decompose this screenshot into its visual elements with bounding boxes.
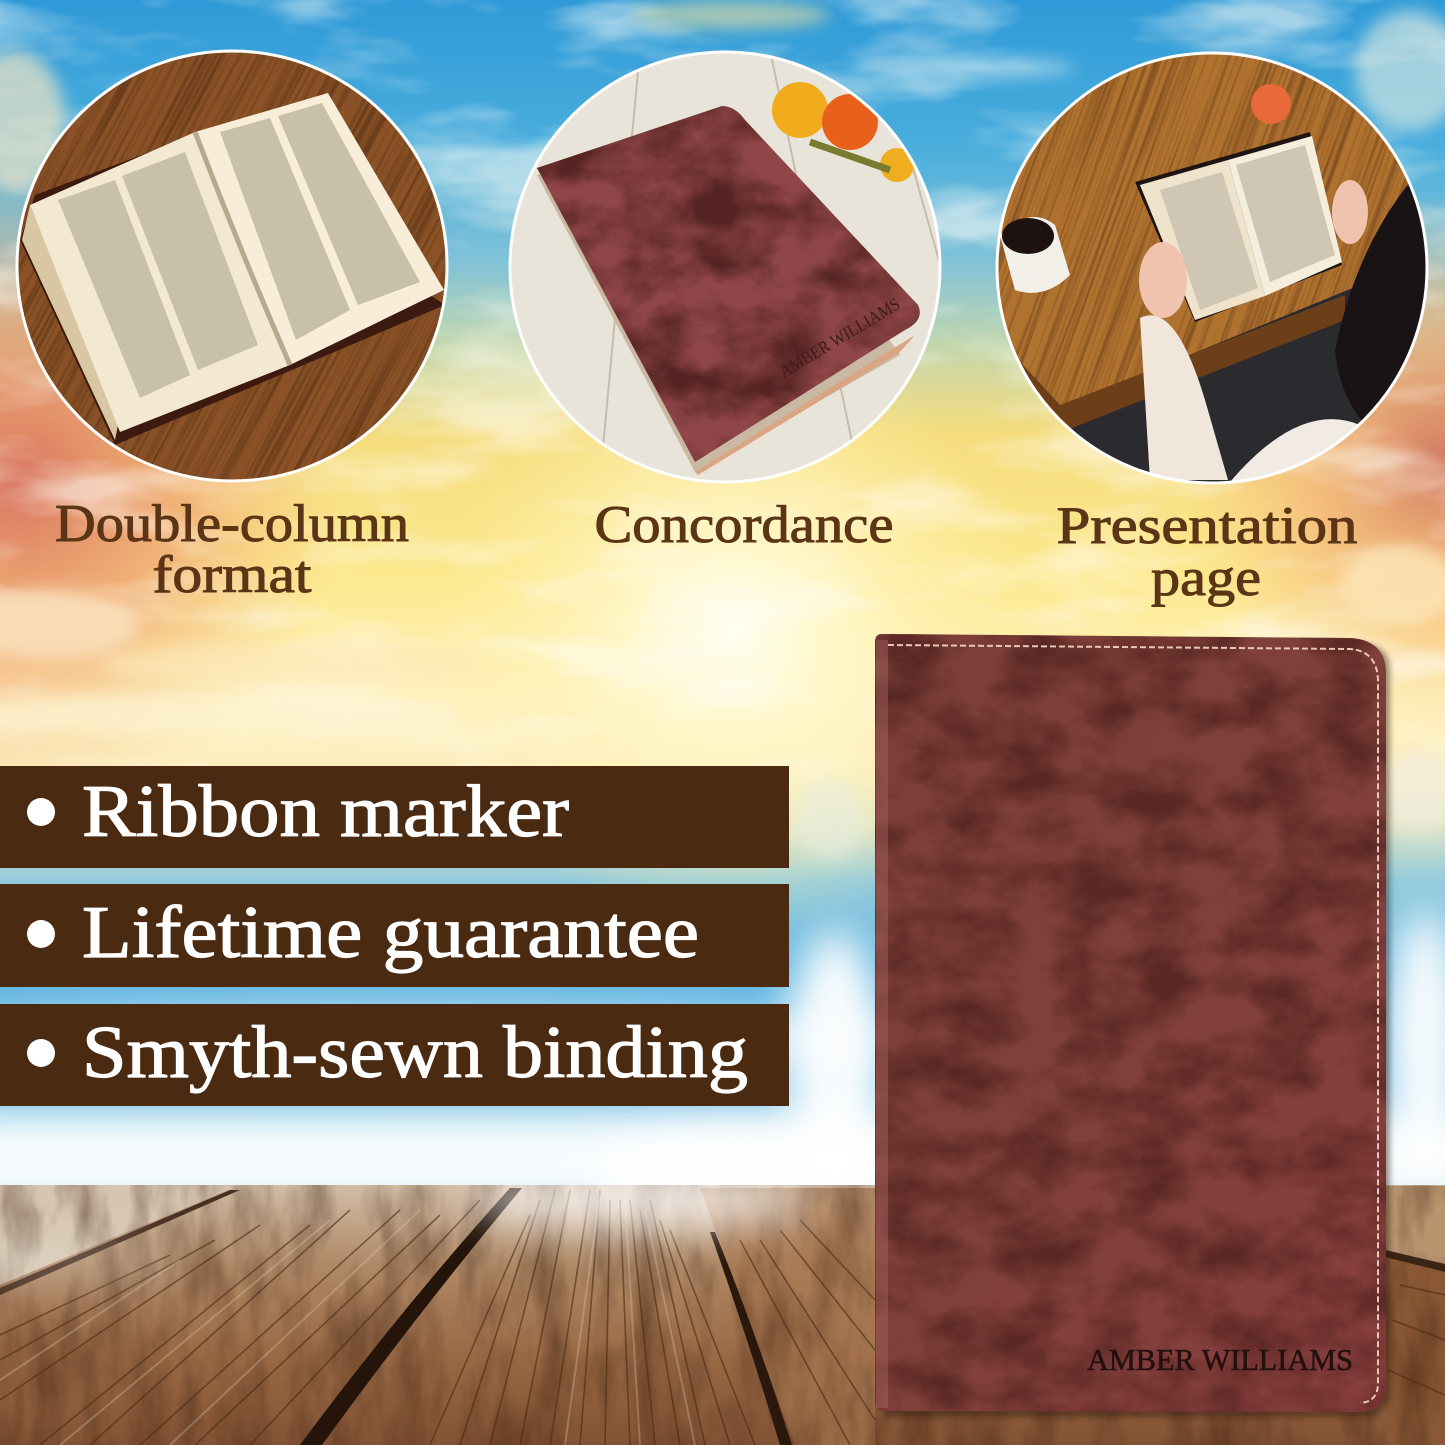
- caption: concordance: Concordance: [594, 496, 894, 554]
- plank grain lines: [0, 1190, 1445, 1445]
- feature bar: ribbon marker: [0, 766, 789, 868]
- wooden deck: [0, 1172, 1445, 1445]
- stitching: [888, 645, 1378, 1403]
- engraved name small: AMBER WILLIAMS: [776, 294, 903, 381]
- caption: presentation page: Presentation: [1056, 497, 1358, 555]
- caption: double-column format: [55, 495, 409, 604]
- photo circle: open bible on wood table: [16, 50, 448, 482]
- photo circle: woman reading at table: [996, 52, 1428, 484]
- flowers decoration: [772, 82, 914, 182]
- feature bar: smyth-sewn binding: [0, 1004, 789, 1106]
- photo circle: closed bible with flowers: [500, 40, 960, 490]
- page text columns: [58, 103, 420, 398]
- feature bar: lifetime guarantee: Lifetime guarantee: [82, 892, 699, 974]
- engraved name: AMBER WILLIAMS: [1087, 1342, 1353, 1377]
- feature bar: ribbon marker: Ribbon marker: [82, 771, 569, 853]
- feature bar: smyth-sewn binding: Smyth-sewn binding: [82, 1012, 748, 1094]
- caption: double-column format: Double-column: [55, 495, 409, 553]
- caption: presentation page: page: [1151, 549, 1261, 607]
- large leather bible: [875, 634, 1390, 1417]
- coffee cup: [1000, 217, 1070, 293]
- caption: double-column format: format: [152, 546, 312, 604]
- page text columns: [1160, 145, 1335, 310]
- feature bar: lifetime guarantee: [0, 884, 789, 987]
- background: clouds above the deck: [0, 910, 1445, 1230]
- caption: presentation page: [1056, 497, 1358, 607]
